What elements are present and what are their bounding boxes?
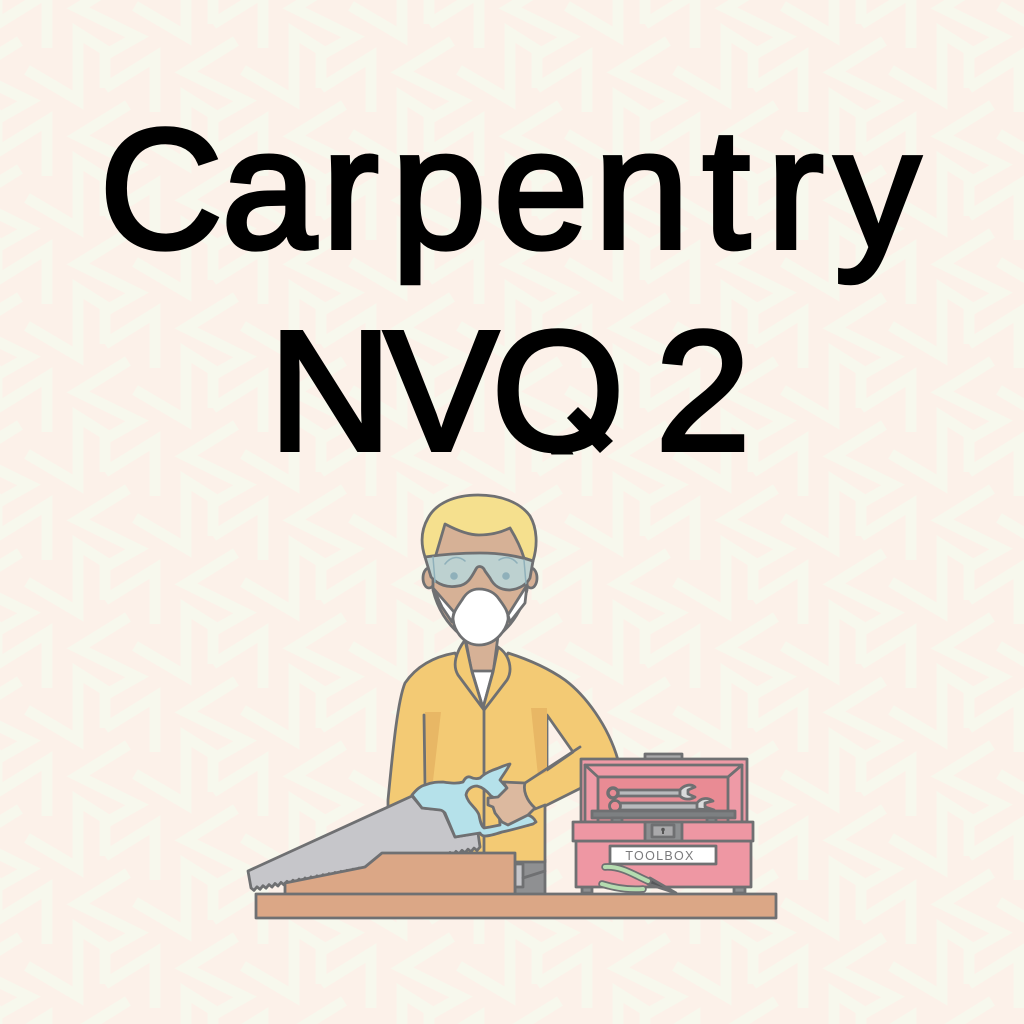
head xyxy=(422,495,537,642)
illustration: carpenter at workbench xyxy=(248,495,776,918)
toolbox xyxy=(573,754,753,893)
toolbox body xyxy=(576,841,751,887)
saw handle xyxy=(412,764,536,837)
wrenches xyxy=(608,785,714,812)
neck xyxy=(465,636,498,674)
lock xyxy=(645,822,682,841)
toolbox label xyxy=(610,846,716,864)
workbench xyxy=(256,894,776,918)
toolbox feet xyxy=(582,887,592,893)
jacket xyxy=(388,640,618,862)
tray xyxy=(592,811,735,818)
pliers xyxy=(602,867,676,893)
title: NVQ 2 xyxy=(269,296,750,486)
trousers xyxy=(515,860,545,895)
toolbox handle xyxy=(645,754,682,760)
mask xyxy=(433,585,527,645)
saw blade xyxy=(248,796,480,890)
toolbox band xyxy=(573,822,753,841)
title xyxy=(106,126,924,454)
toolbox lid xyxy=(581,759,747,822)
hand xyxy=(488,782,535,825)
wood block xyxy=(285,853,515,897)
toolbox label: TOOLBOX xyxy=(625,849,695,863)
title: Carpentry xyxy=(100,94,920,284)
